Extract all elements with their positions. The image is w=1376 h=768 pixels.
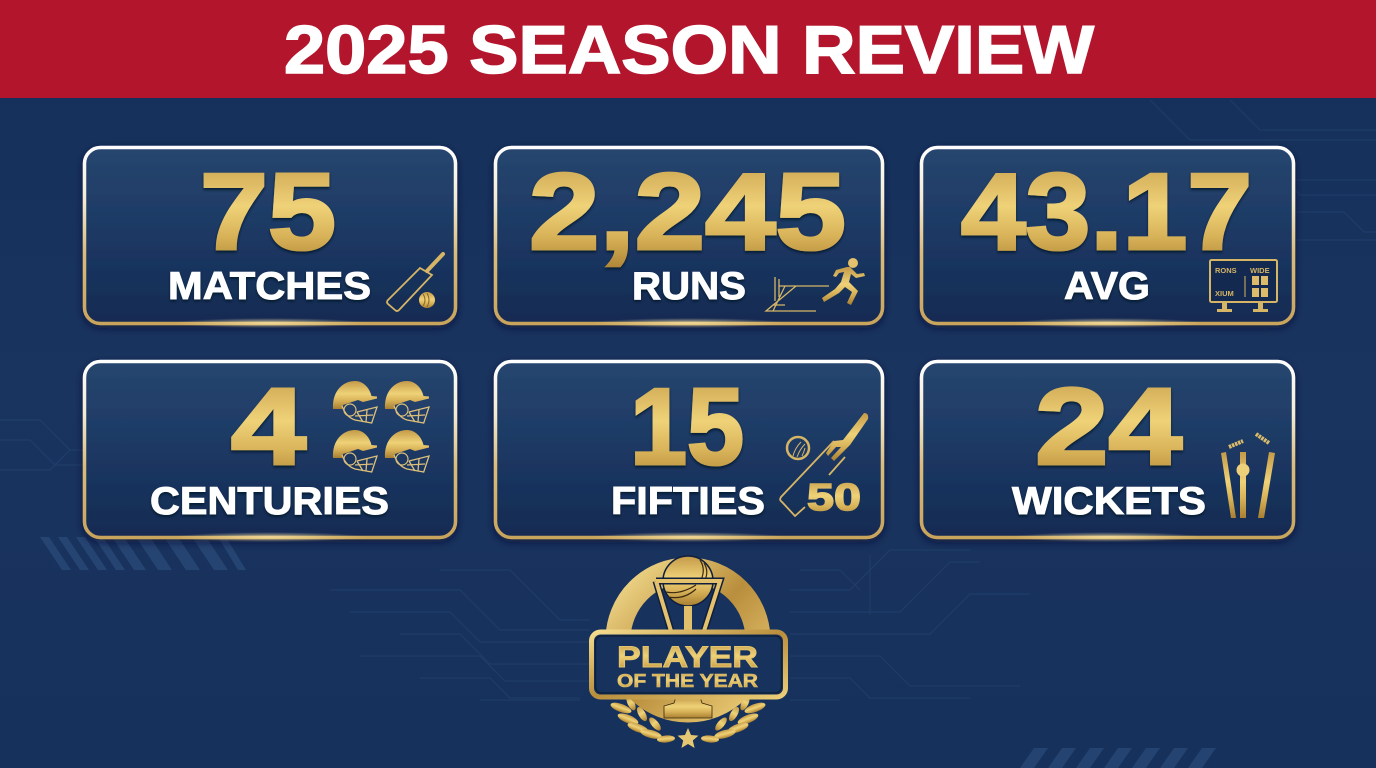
plaque xyxy=(592,632,786,697)
panel: runs xyxy=(496,148,882,328)
trophy cup frame xyxy=(656,581,720,632)
number: 43.17: 43.17 xyxy=(961,151,1252,273)
hatched stripes bottom right xyxy=(1020,748,1216,768)
label: avg: AVG xyxy=(1064,265,1150,308)
icon: scoreboard: WIDE xyxy=(1250,266,1270,275)
label: matches: MATCHES xyxy=(168,265,371,308)
star xyxy=(678,728,698,748)
panel: avg xyxy=(922,148,1294,328)
title banner xyxy=(0,0,1376,98)
badge: player of the year xyxy=(592,556,786,748)
label: wickets: WICKETS xyxy=(1012,480,1206,523)
icon: bat, ball and 50 xyxy=(780,413,868,519)
icon: broken wicket xyxy=(1221,434,1275,518)
panel: matches xyxy=(84,148,456,328)
label: centuries: CENTURIES xyxy=(150,480,389,523)
number: 15: 15 xyxy=(630,366,744,488)
circuit background pattern xyxy=(0,100,1376,700)
hatched stripes left xyxy=(40,537,246,570)
trophy ball xyxy=(663,556,713,606)
plaque text: of the year: OF THE YEAR xyxy=(617,671,758,691)
number: 24: 24 xyxy=(1035,366,1182,488)
trophy base xyxy=(664,697,712,718)
title: 2025 SEASON REVIEW xyxy=(284,12,1095,88)
panel: centuries xyxy=(84,362,456,542)
plaque text: player: PLAYER xyxy=(617,641,758,674)
gold ring xyxy=(618,570,758,710)
icon: bat, ball and 50: 50 xyxy=(807,477,861,519)
laurel wreath xyxy=(609,694,767,743)
icon: scoreboard: RONS xyxy=(1215,266,1237,275)
icon: scoreboard: XIUM xyxy=(1215,289,1234,298)
panel: wickets xyxy=(922,362,1294,542)
number: 2,245: 2,245 xyxy=(529,151,846,273)
icon: bat and ball xyxy=(387,254,443,311)
icon: runner on pitch xyxy=(766,258,865,311)
label: runs: RUNS xyxy=(632,265,746,308)
label: fifties: FIFTIES xyxy=(611,480,765,523)
panel: fifties xyxy=(496,362,882,542)
icon: four helmets xyxy=(333,381,429,472)
number: 75: 75 xyxy=(200,151,336,273)
number: 4: 4 xyxy=(231,366,306,488)
icon: scoreboard xyxy=(1210,260,1277,312)
